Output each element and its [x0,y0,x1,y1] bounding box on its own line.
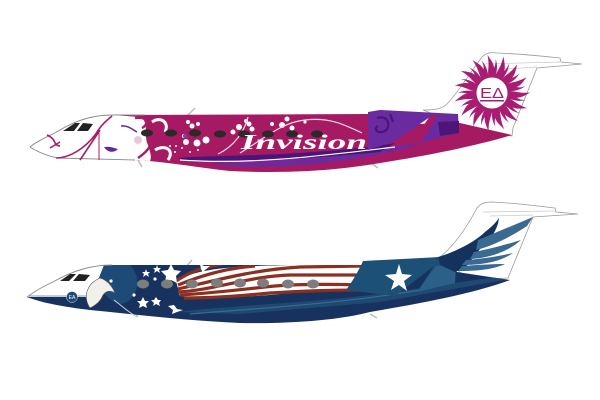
engine nacelle [368,110,459,150]
cockpit windows [60,274,90,281]
purple flower centres [183,134,187,138]
tail sunburst logo [454,55,530,131]
nose roundel: EA [69,295,76,301]
illustration: two aircraft liveries [26,52,582,324]
wing tips [128,260,377,318]
flag stripes background [176,265,363,297]
tail fin [423,53,582,136]
stars [132,264,210,314]
fuselage [27,257,510,323]
tail fin [440,202,578,280]
tail sunburst logo: EΔ [480,85,504,102]
flower decorations [169,116,307,153]
aircraft: American eagle navy jet [20,202,578,323]
airline name: Invision [239,130,367,154]
fuselage outline [30,115,145,160]
engine nacelle with star [346,257,456,296]
flag red stripes [176,264,363,298]
white pinstripe [180,147,395,161]
white nose [28,266,104,297]
dark purple swoosh [178,143,395,162]
lower purple swoosh [210,142,425,167]
eagle beak [86,278,137,317]
cabin windows [141,129,323,138]
nose outline [27,265,112,297]
fuselage [30,114,512,172]
eagle wing feathers on tail [438,217,533,272]
nose roundel [66,292,78,302]
face artwork [47,116,170,160]
aircraft: Invision magenta jet [20,53,582,172]
decorative white swirl lines [218,117,362,154]
cabin windows [137,278,319,288]
white nose and face [30,116,151,161]
cockpit windows [63,123,93,131]
eagle head blue [99,265,137,304]
lower blue sash [175,275,510,314]
wing tips [138,108,378,168]
